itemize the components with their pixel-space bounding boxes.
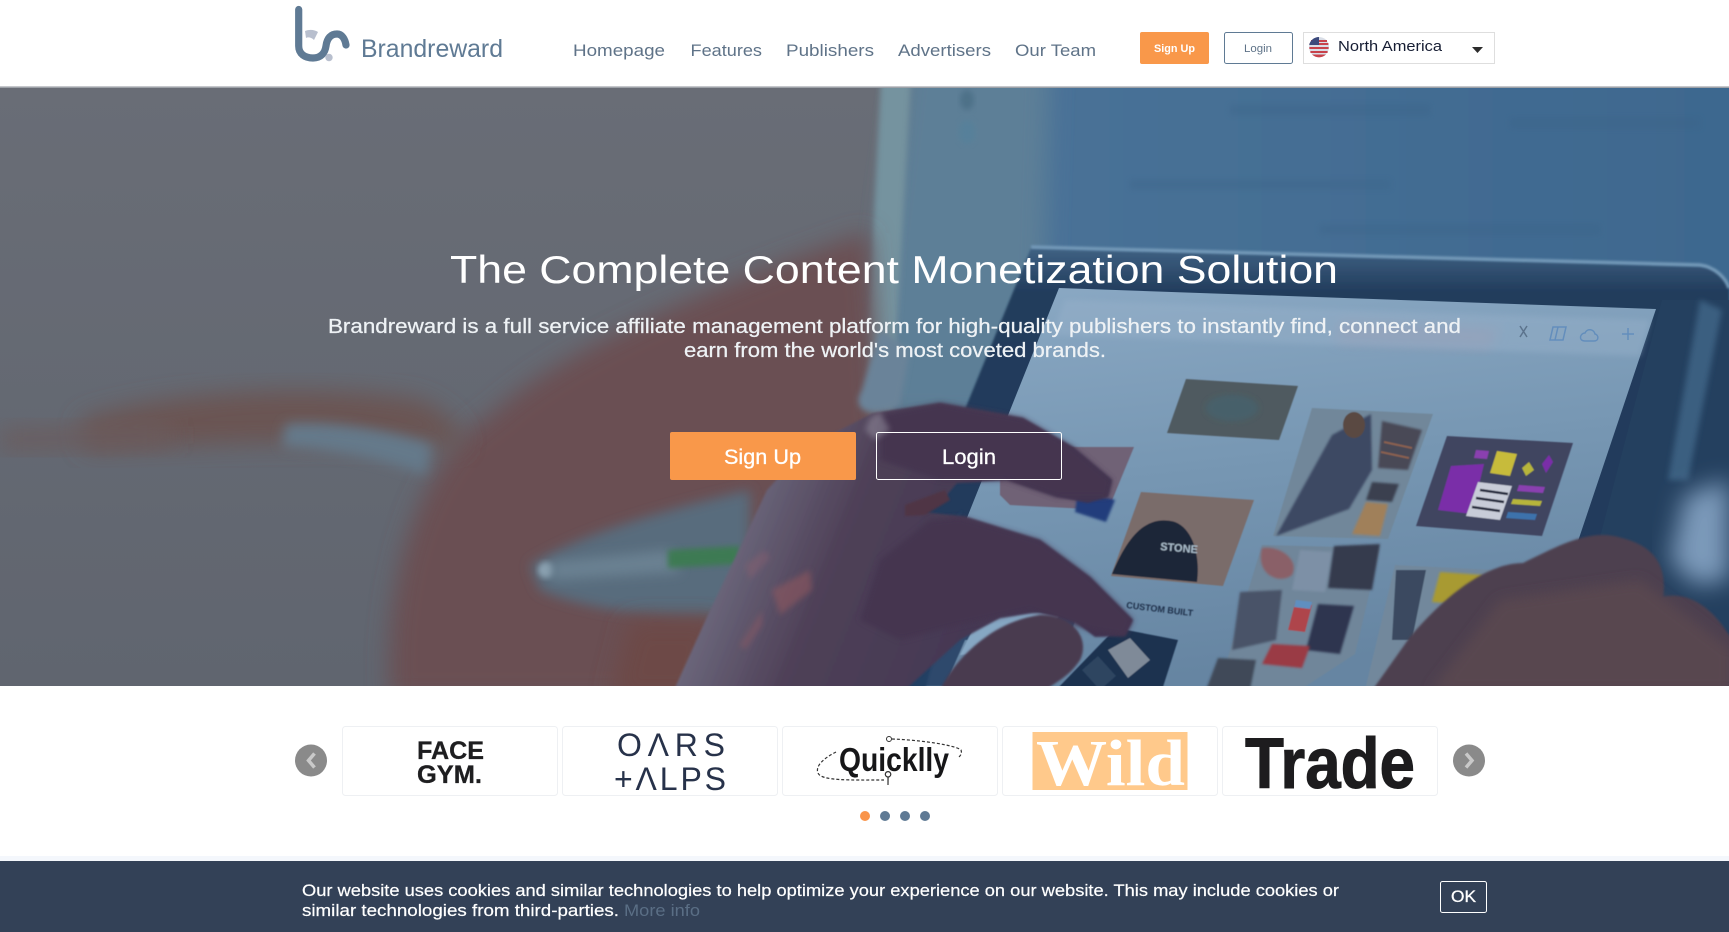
thumb bbox=[940, 615, 1083, 690]
card: Face Gym: FACE bbox=[417, 737, 484, 765]
navigation menu: Publishers bbox=[786, 41, 874, 60]
hero login button: Login bbox=[942, 446, 996, 469]
header login button: Login bbox=[1244, 43, 1272, 55]
cookie notice text: More info bbox=[624, 901, 700, 920]
header sign up button bbox=[1140, 32, 1209, 64]
hero title: The Complete Content Monetization Solution bbox=[450, 249, 1338, 292]
cookie OK button bbox=[1440, 882, 1486, 912]
icon: previous arrow bbox=[295, 744, 327, 776]
card: Face Gym bbox=[342, 726, 558, 796]
icon: next arrow bbox=[1453, 744, 1485, 776]
hero panel bbox=[0, 40, 1729, 700]
navigation menu: Advertisers bbox=[898, 41, 991, 60]
header login button bbox=[1224, 32, 1292, 64]
tile: lower clothing bbox=[1206, 544, 1380, 690]
hero sign up button: Sign Up bbox=[724, 446, 801, 469]
navigation menu: Our Team bbox=[1015, 41, 1096, 60]
tablet screen bbox=[898, 288, 1656, 690]
cookie OK button: OK bbox=[1451, 887, 1477, 906]
brand carousel bbox=[295, 725, 1485, 821]
header bbox=[299, 10, 1495, 64]
cookie notice text bbox=[302, 881, 1339, 920]
cookie notice bar bbox=[0, 861, 1729, 932]
card: Wild bbox=[1002, 726, 1218, 800]
carousel pagination dots bbox=[860, 811, 930, 821]
header sign up button: Sign Up bbox=[1154, 43, 1195, 55]
tablet keyboard bbox=[1059, 630, 1178, 686]
hero photo: blurred background bbox=[0, 40, 1729, 700]
hero subtitle bbox=[328, 316, 1461, 362]
card: Oars + Alps: OΛRS bbox=[617, 727, 725, 763]
card: Trade: Trade bbox=[1245, 725, 1415, 804]
hero subtitle: earn from the world's most coveted brands. bbox=[684, 340, 1106, 362]
tile: clothing collage bbox=[1273, 408, 1433, 539]
tile: fabric swatch bbox=[1000, 447, 1134, 510]
hero login button bbox=[876, 432, 1062, 480]
tile: yellow clothing bbox=[1365, 565, 1495, 690]
navigation menu bbox=[573, 41, 1096, 60]
icon: US flag bbox=[1309, 37, 1329, 57]
navigation menu: Homepage bbox=[573, 41, 665, 60]
logo bbox=[299, 10, 503, 63]
card: Face Gym: GYM. bbox=[417, 761, 482, 789]
cookie notice text: similar technologies from third-parties. bbox=[302, 901, 619, 920]
knuckle marks bbox=[772, 570, 812, 615]
tile label: custom built: CUSTOM BUILT bbox=[1126, 600, 1194, 618]
hero sign up button bbox=[670, 432, 856, 480]
card: Quicklly: Quicklly bbox=[839, 741, 950, 778]
right hand bbox=[1371, 535, 1729, 692]
card: Oars + Alps: +ΛLPS bbox=[614, 761, 726, 797]
card: Quicklly bbox=[782, 726, 998, 796]
region selector: North America bbox=[1338, 38, 1443, 55]
hero subtitle: Brandreward is a full service affiliate management platform for high-quality publishers to instantly find, connect and bbox=[328, 316, 1461, 338]
logo: Brandreward bbox=[361, 35, 503, 63]
tile: stone beanie: STONE bbox=[1160, 541, 1198, 556]
tablet device bbox=[850, 247, 1729, 690]
card: Wild: Wild bbox=[1036, 727, 1185, 800]
tile: stone beanie bbox=[1111, 492, 1254, 586]
navigation menu: Features bbox=[690, 41, 762, 60]
toolbar icons bbox=[1520, 326, 1634, 341]
card: Oars + Alps bbox=[562, 726, 778, 797]
strip above cookie bar bbox=[0, 856, 1729, 861]
left hand bbox=[674, 403, 1133, 690]
header shadow line bbox=[0, 86, 1729, 88]
cookie notice text: Our website uses cookies and similar technologies to help optimize your experience on our website. This may include cookies or bbox=[302, 881, 1339, 900]
tile: dark photo bbox=[1167, 379, 1298, 440]
icon: dropdown arrow bbox=[1472, 47, 1483, 53]
region selector bbox=[1304, 32, 1494, 64]
tile: colourful pattern bbox=[1416, 436, 1573, 536]
tile: small screen bbox=[925, 613, 1074, 686]
